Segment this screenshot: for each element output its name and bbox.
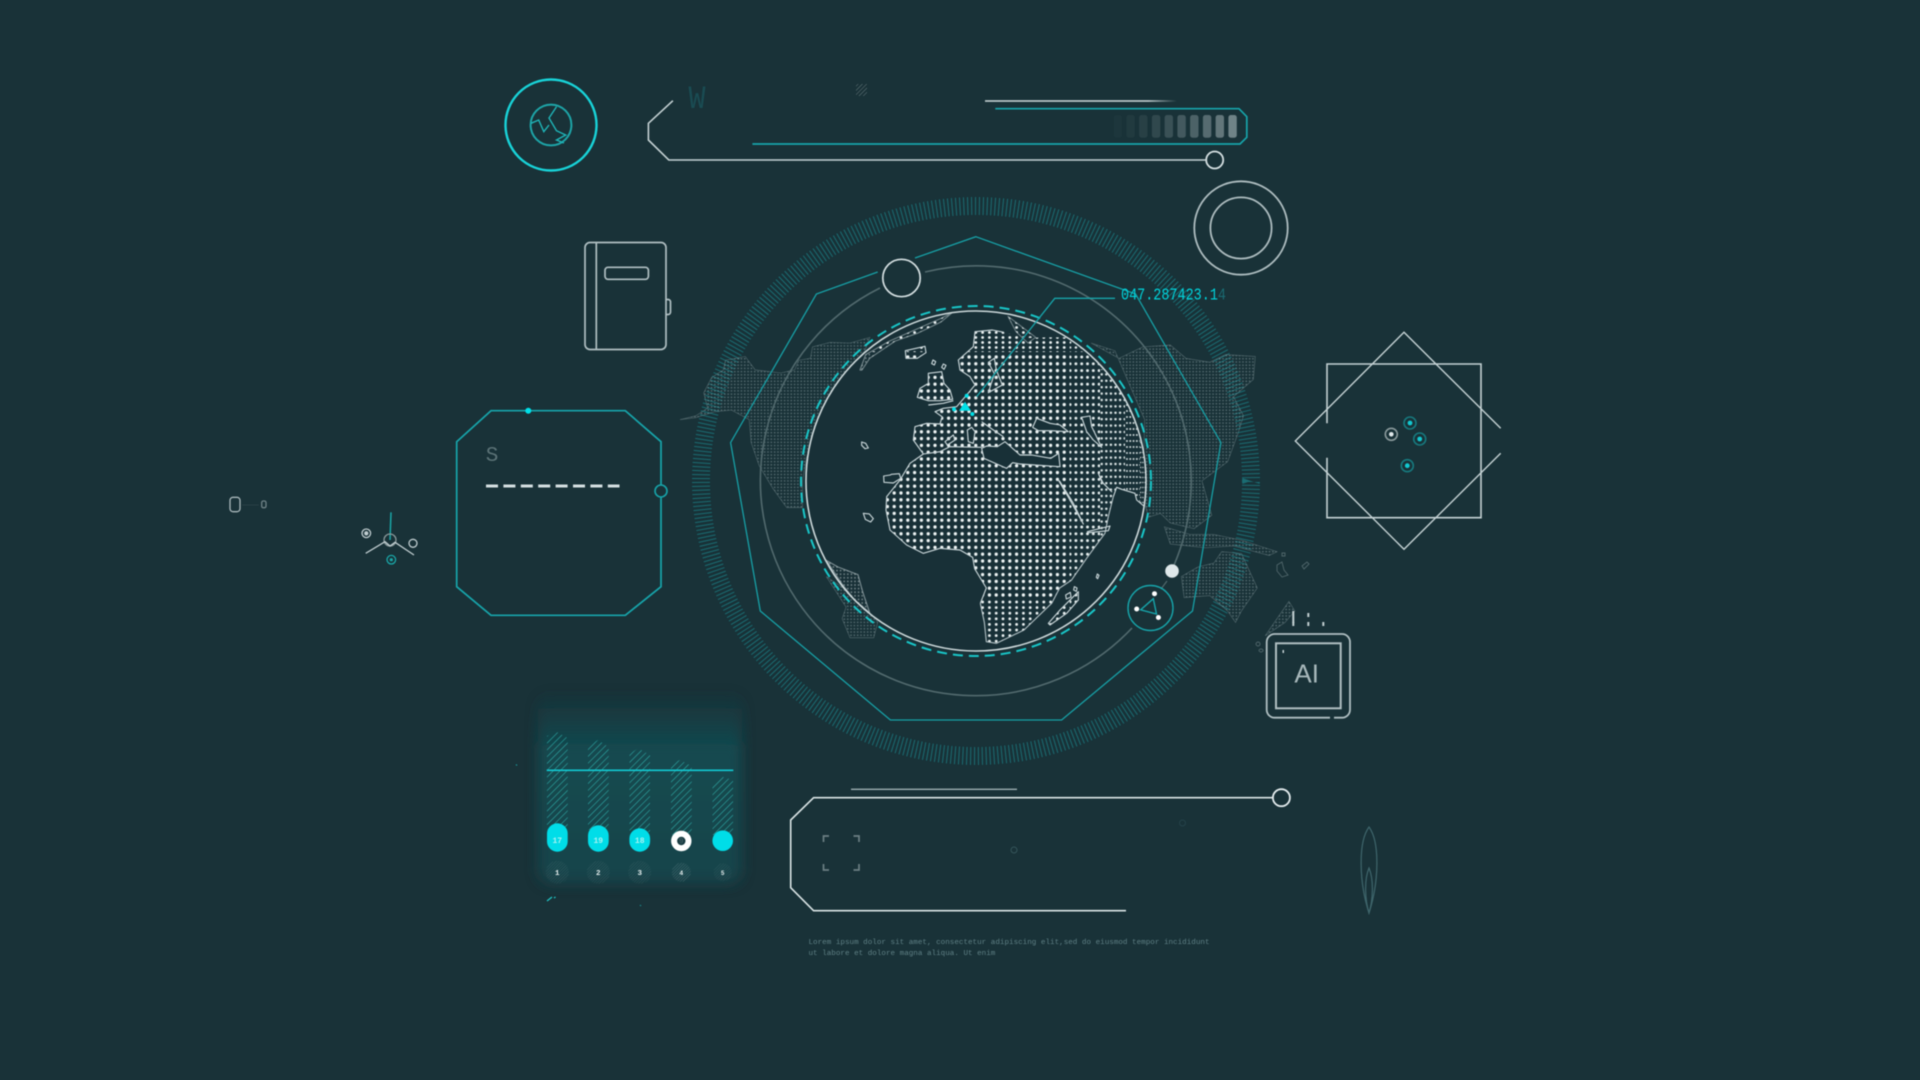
icon: earth badge [506,80,596,170]
value pills: 19 [593,837,603,846]
HUD canvas [228,78,1502,957]
coastline outlines [826,312,1145,643]
icon: AI chip: AI [1294,658,1319,688]
panel: rotated squares with nodes [1295,332,1501,549]
value pills: 18 [635,837,645,846]
numbered axis badges: 1 [555,870,560,878]
chart background glow [538,692,742,884]
location marker [952,394,974,416]
orbit white ball [1165,564,1179,578]
value pills [547,823,733,852]
icon: concentric rings [1194,181,1288,275]
faint letter W: W [688,81,706,118]
numbered axis badges: 5 [721,870,725,877]
lorem ipsum caption [808,939,1210,958]
icon: AI chip [1267,611,1350,718]
chart panel [516,692,742,906]
coordinate readout: 047.287423.14 [1121,286,1226,304]
icon: small device with counter [230,497,266,512]
dashed cyan ring [801,306,1151,656]
dotted land [826,313,1146,644]
lorem ipsum caption: Lorem ipsum dolor sit amet, consectetur adipiscing elit,sed do eiusmod tempor incididunt [808,939,1210,947]
top bracket panel [648,100,1247,168]
panel: octagon with S label: S [486,445,498,468]
bottom bracket panel [791,789,1290,911]
globe [804,310,1148,652]
numbered axis badges [546,861,732,884]
hatched bars [547,732,733,835]
icon: teardrop pin [1361,827,1377,913]
threshold line [547,769,733,771]
lorem ipsum caption: ut labore et dolore magna aliqua. Ut enim [808,950,996,958]
small pacific islands [1256,553,1309,652]
tick ring around globe [701,206,1251,756]
dotted world map backdrop [680,337,1295,638]
orbit node circle [883,259,920,297]
network node icon [1128,581,1173,630]
progress bar segments [1114,115,1237,138]
value pills: 17 [552,837,562,846]
small hatch mark [856,84,867,96]
panel: octagon with S label [457,408,667,615]
location leader line [977,298,1115,397]
outer teal polygon frame [731,237,1221,720]
grey orbit ring [760,266,1191,696]
numbered axis badges: 2 [596,870,601,878]
stray chart marks [516,764,641,906]
icon: notebook [585,242,671,350]
value pills: 9 [679,838,684,846]
icon: three-arm node [362,512,417,564]
numbered axis badges: 3 [637,870,642,878]
numbered axis badges: 4 [679,870,683,877]
